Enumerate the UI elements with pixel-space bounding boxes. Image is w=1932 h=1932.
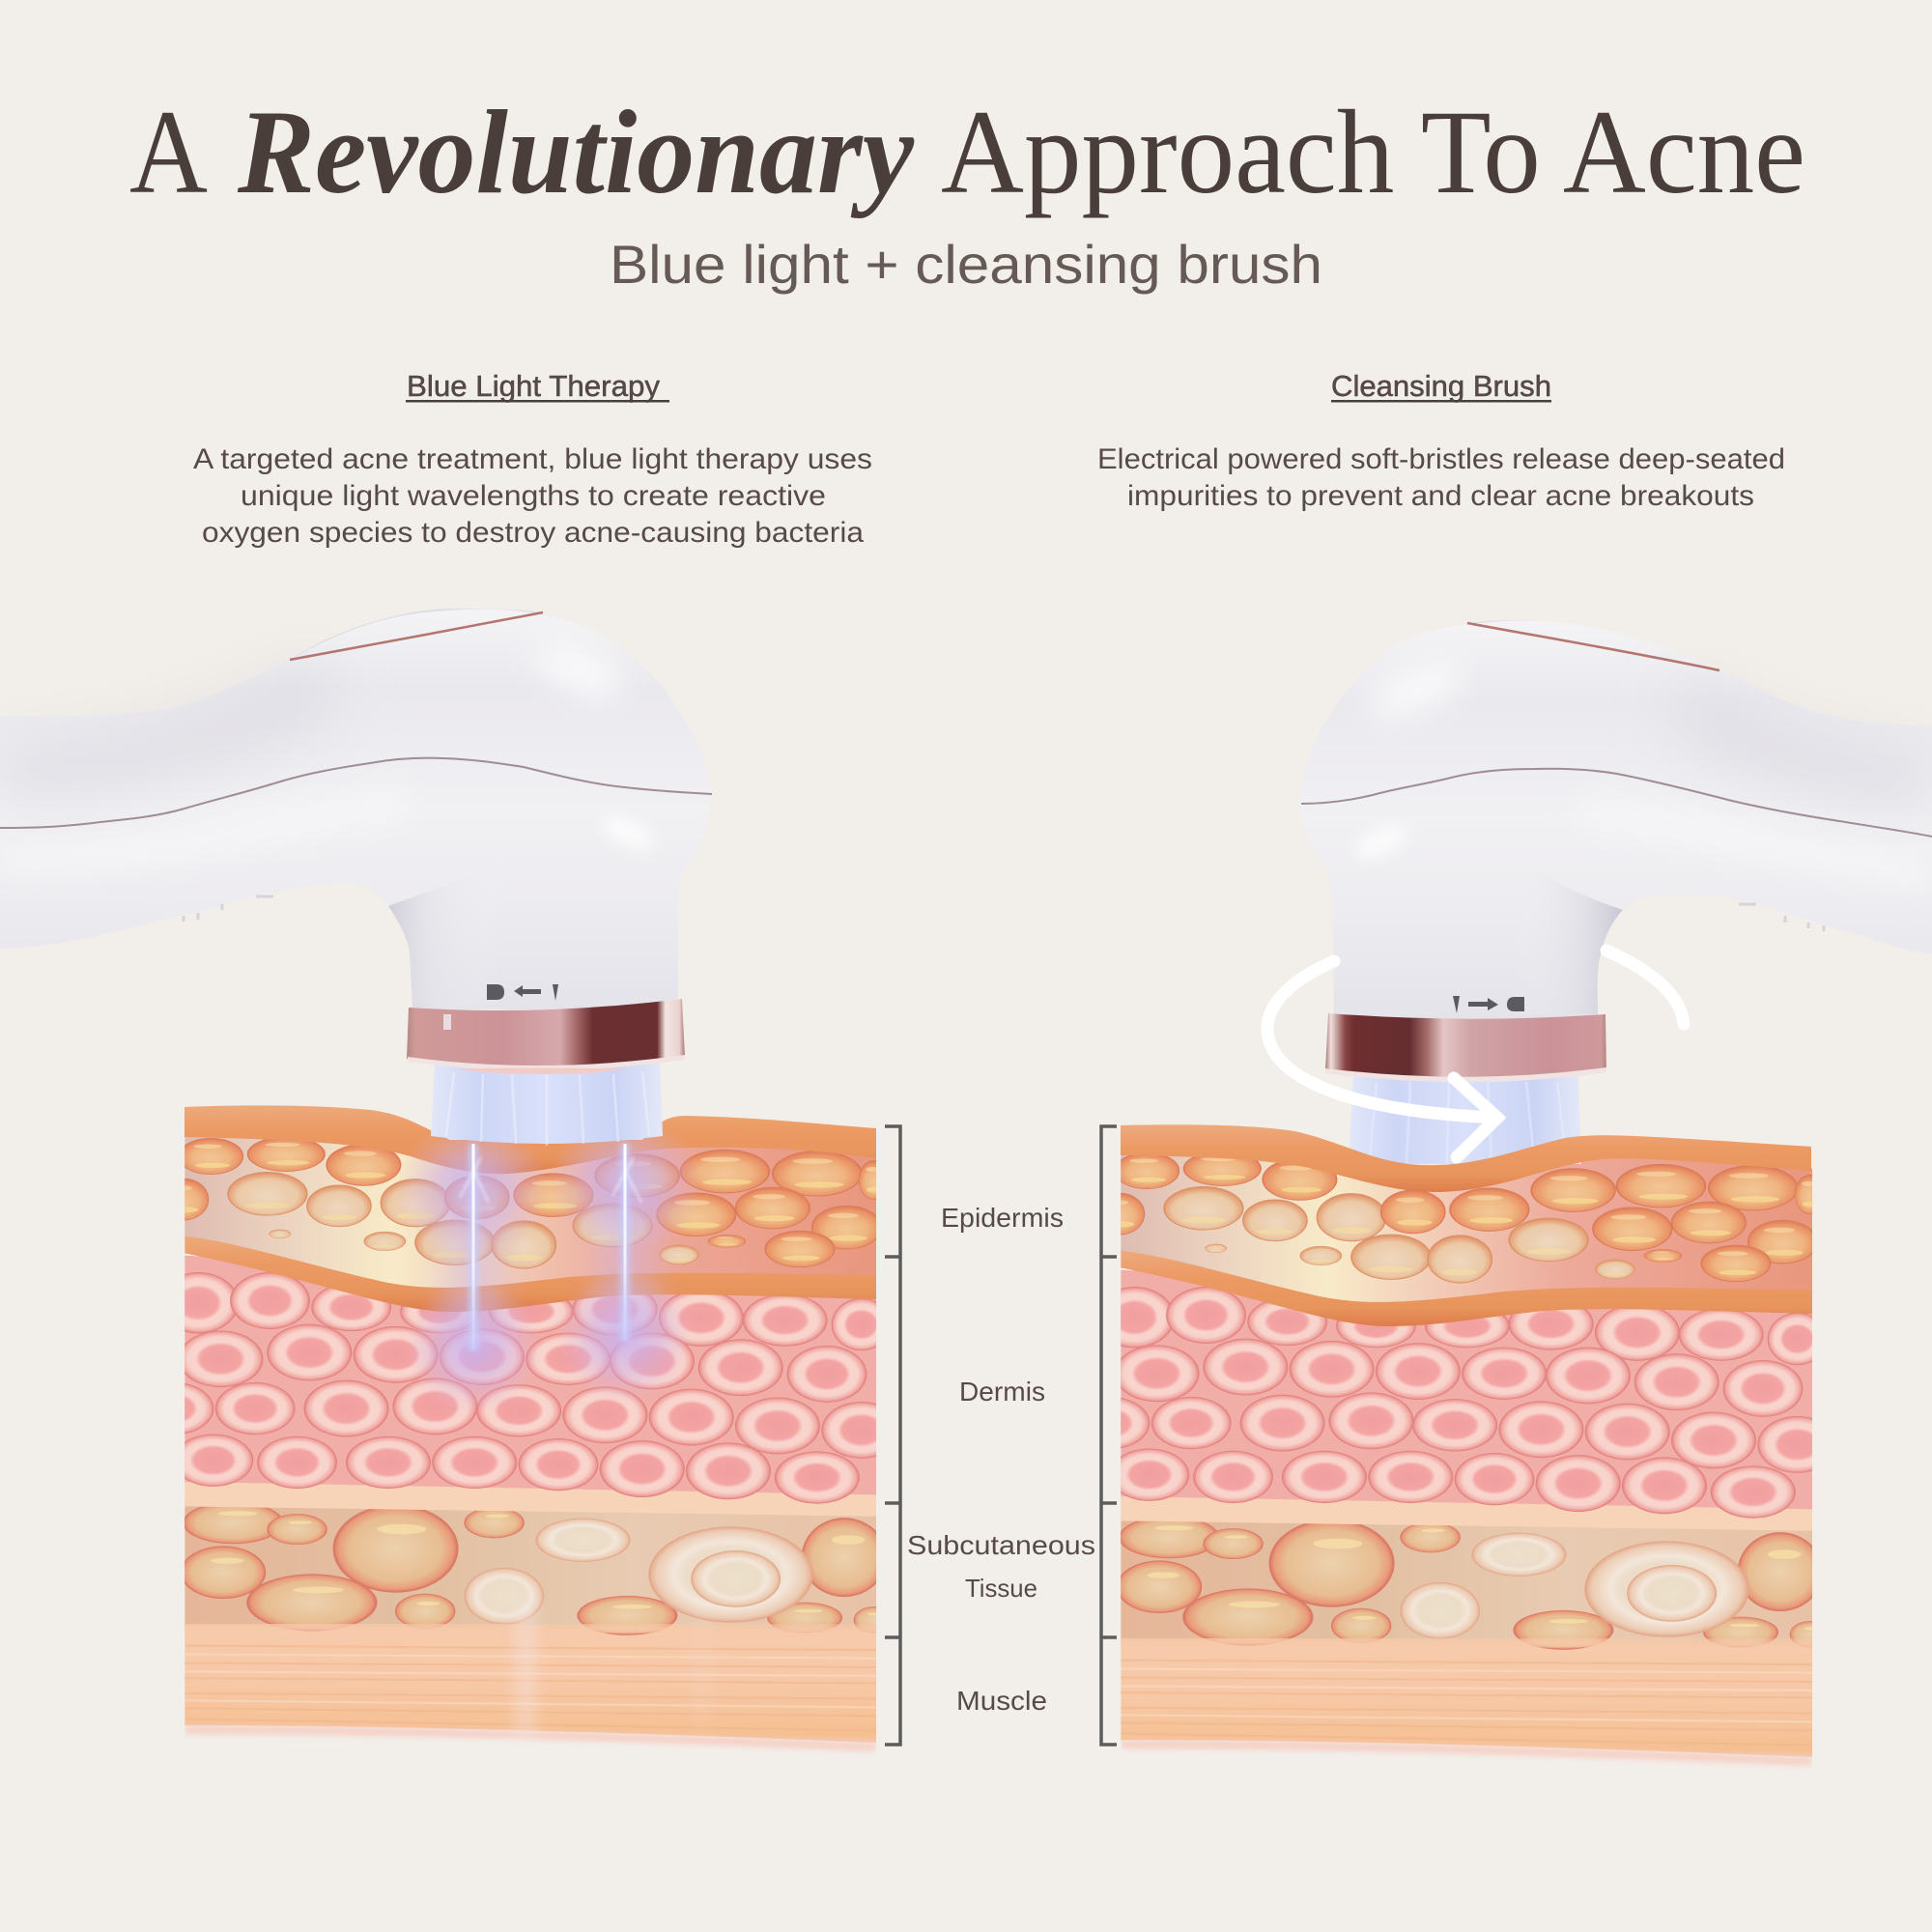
- skin top band: left: [185, 1105, 876, 1174]
- epidermis lower band: [185, 1236, 876, 1312]
- seam line: [0, 758, 712, 828]
- faint lower streaks: [515, 1604, 709, 1739]
- direction icon: [487, 984, 558, 1001]
- heading: cleansing brush: Cleansing Brush: [1331, 369, 1551, 403]
- handle marks: [184, 896, 273, 922]
- neck shading: [1512, 855, 1623, 1014]
- beam: left: [460, 1144, 489, 1350]
- description: oxygen species to destroy acne-causing bacteria: [202, 517, 864, 549]
- panel: cleansing brush text: [1097, 369, 1785, 512]
- handle marks: [1739, 904, 1824, 931]
- label: muscle: Muscle: [956, 1686, 1047, 1716]
- shade: handle top: [1681, 705, 1932, 782]
- label: epidermis: Epidermis: [941, 1203, 1064, 1233]
- highlight: handle: [0, 802, 406, 860]
- glow: [396, 1114, 702, 1413]
- highlight: head: [1364, 657, 1466, 724]
- underline: [1331, 400, 1551, 402]
- highlight: handle: [1584, 811, 1932, 874]
- arc: [1267, 961, 1497, 1118]
- highlight: lower head: [1352, 820, 1410, 865]
- brush head: [1349, 1074, 1581, 1164]
- shade: handle top: [0, 686, 328, 773]
- device: right: [1121, 620, 1932, 1192]
- description: A targeted acne treatment, blue light therapy uses: [193, 443, 872, 475]
- title: [129, 86, 1805, 218]
- rose gold collar: [1325, 1013, 1606, 1082]
- description: Electrical powered soft-bristles release deep-seated: [1097, 443, 1785, 475]
- label: subcutaneous tissue: Tissue: [965, 1574, 1037, 1603]
- direction icon: [1453, 996, 1524, 1013]
- title: Approach To Acne: [941, 86, 1805, 218]
- device: left: [0, 609, 712, 1146]
- body: [1300, 621, 1932, 1020]
- subcutaneous layer: [174, 1501, 894, 1634]
- neck shading: [388, 860, 502, 1009]
- rotation arrow: [1267, 951, 1684, 1157]
- label: subcutaneous tissue: [907, 1530, 1095, 1603]
- arrow tail: [1606, 951, 1684, 1024]
- muscle layer: [185, 1624, 876, 1747]
- dermis layer: [134, 1256, 901, 1517]
- rose gold collar: [407, 999, 685, 1074]
- brush head: [431, 1063, 663, 1146]
- description: unique light wavelengths to create reactive: [241, 480, 826, 512]
- label: dermis: Dermis: [959, 1377, 1045, 1406]
- subtitle: Blue light + cleansing brush: [610, 234, 1322, 295]
- skin top band: [1121, 1124, 1811, 1192]
- rose trim on button: [290, 612, 543, 660]
- underline: [406, 400, 669, 402]
- epidermis layer: [159, 1132, 889, 1292]
- description: impurities to prevent and clear acne breakouts: [1127, 480, 1754, 512]
- bracket: left: [885, 1126, 900, 1745]
- silver button: [290, 609, 543, 660]
- heading: blue light therapy: Blue Light Therapy: [407, 369, 661, 403]
- skin cross-section: left: [134, 1132, 901, 1747]
- label: subcutaneous tissue: Subcutaneous: [907, 1530, 1095, 1560]
- title: A: [129, 86, 208, 218]
- layer labels: [907, 1203, 1095, 1716]
- seam line: [1301, 769, 1932, 837]
- skin cross-section: right: [1070, 1147, 1837, 1762]
- highlight: lower head: [599, 810, 657, 855]
- bracket: right: [1101, 1126, 1117, 1745]
- arrow head: [1454, 1078, 1497, 1157]
- beam: right: [612, 1144, 641, 1341]
- body: [0, 610, 710, 1009]
- rose trim on button: [1467, 623, 1719, 670]
- description: [1097, 443, 1785, 512]
- panel: blue light therapy text: [193, 369, 872, 549]
- silver button: [1467, 620, 1719, 670]
- highlight: head: [533, 638, 626, 705]
- description: [193, 443, 872, 549]
- light beams: [396, 1114, 709, 1739]
- title: Revolutionary: [237, 86, 915, 218]
